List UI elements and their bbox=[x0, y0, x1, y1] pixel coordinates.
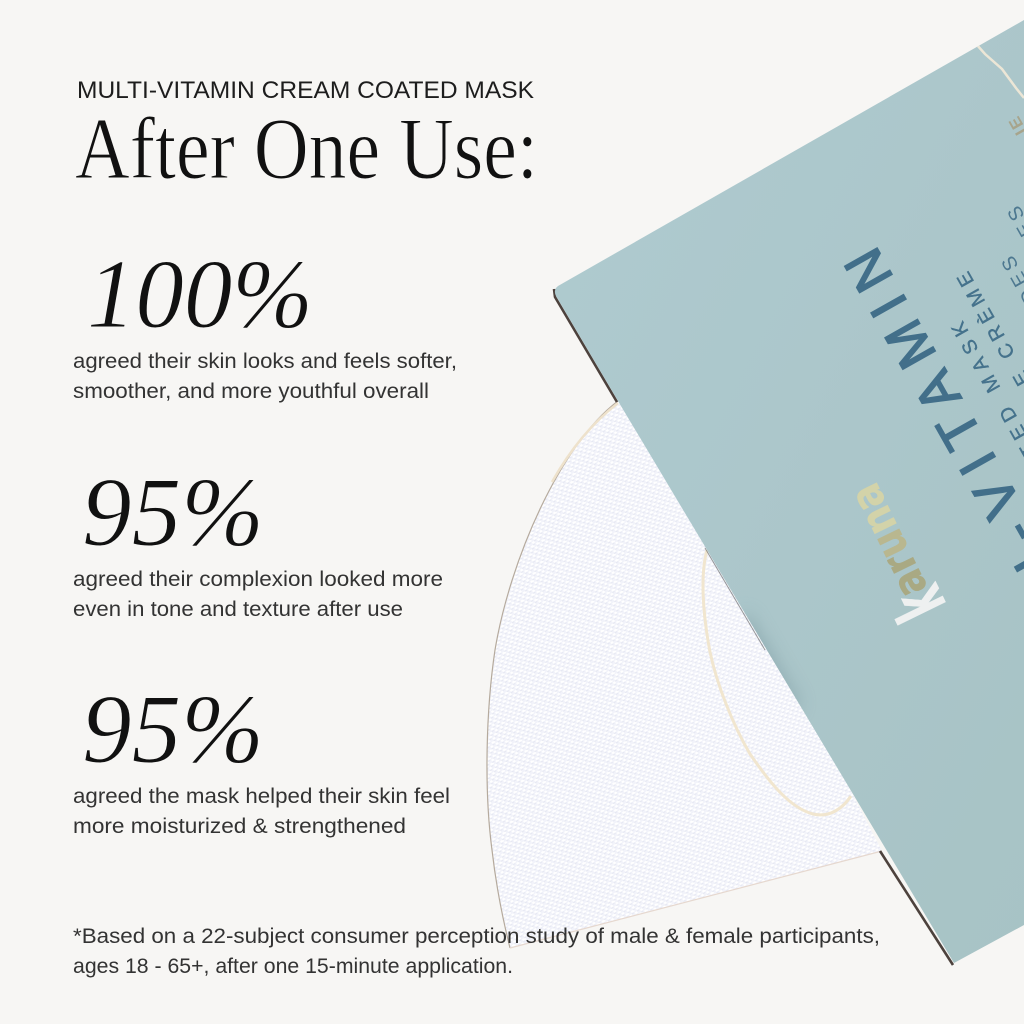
stat 3 bbox=[73, 675, 450, 838]
eyebrow heading: MULTI-VITAMIN CREAM COATED MASK bbox=[77, 77, 534, 104]
foil packet bbox=[555, 20, 1024, 963]
main title: After One Use: bbox=[75, 101, 538, 198]
stat 1 description: smoother, and more youthful overall bbox=[73, 380, 429, 403]
stat 1 description: agreed their skin looks and feels softer, bbox=[73, 350, 457, 373]
brand logo: k bbox=[877, 573, 962, 633]
stat 2 number: 95% bbox=[82, 458, 264, 567]
brand logo bbox=[857, 482, 946, 626]
stat 1 number: 100% bbox=[87, 240, 313, 349]
footnote: ages 18 - 65+, after one 15-minute application. bbox=[73, 955, 513, 978]
stat 1 bbox=[73, 240, 457, 403]
packet seal line bbox=[977, 45, 1024, 98]
eye opening outline bbox=[703, 550, 851, 815]
packet shadow edges bbox=[554, 289, 953, 965]
stat 2 description: even in tone and texture after use bbox=[73, 598, 403, 621]
stat 3 number: 95% bbox=[82, 675, 264, 784]
footnote: *Based on a 22-subject consumer perception study of male & female participants, bbox=[73, 925, 880, 948]
sheet mask bbox=[487, 401, 882, 948]
stat 3 description: more moisturized & strengthened bbox=[73, 815, 406, 838]
stat 3 description: agreed the mask helped their skin feel bbox=[73, 785, 450, 808]
stat 2 bbox=[73, 458, 443, 621]
stat 2 description: agreed their complexion looked more bbox=[73, 568, 443, 591]
brand logo: aruna bbox=[839, 475, 938, 606]
